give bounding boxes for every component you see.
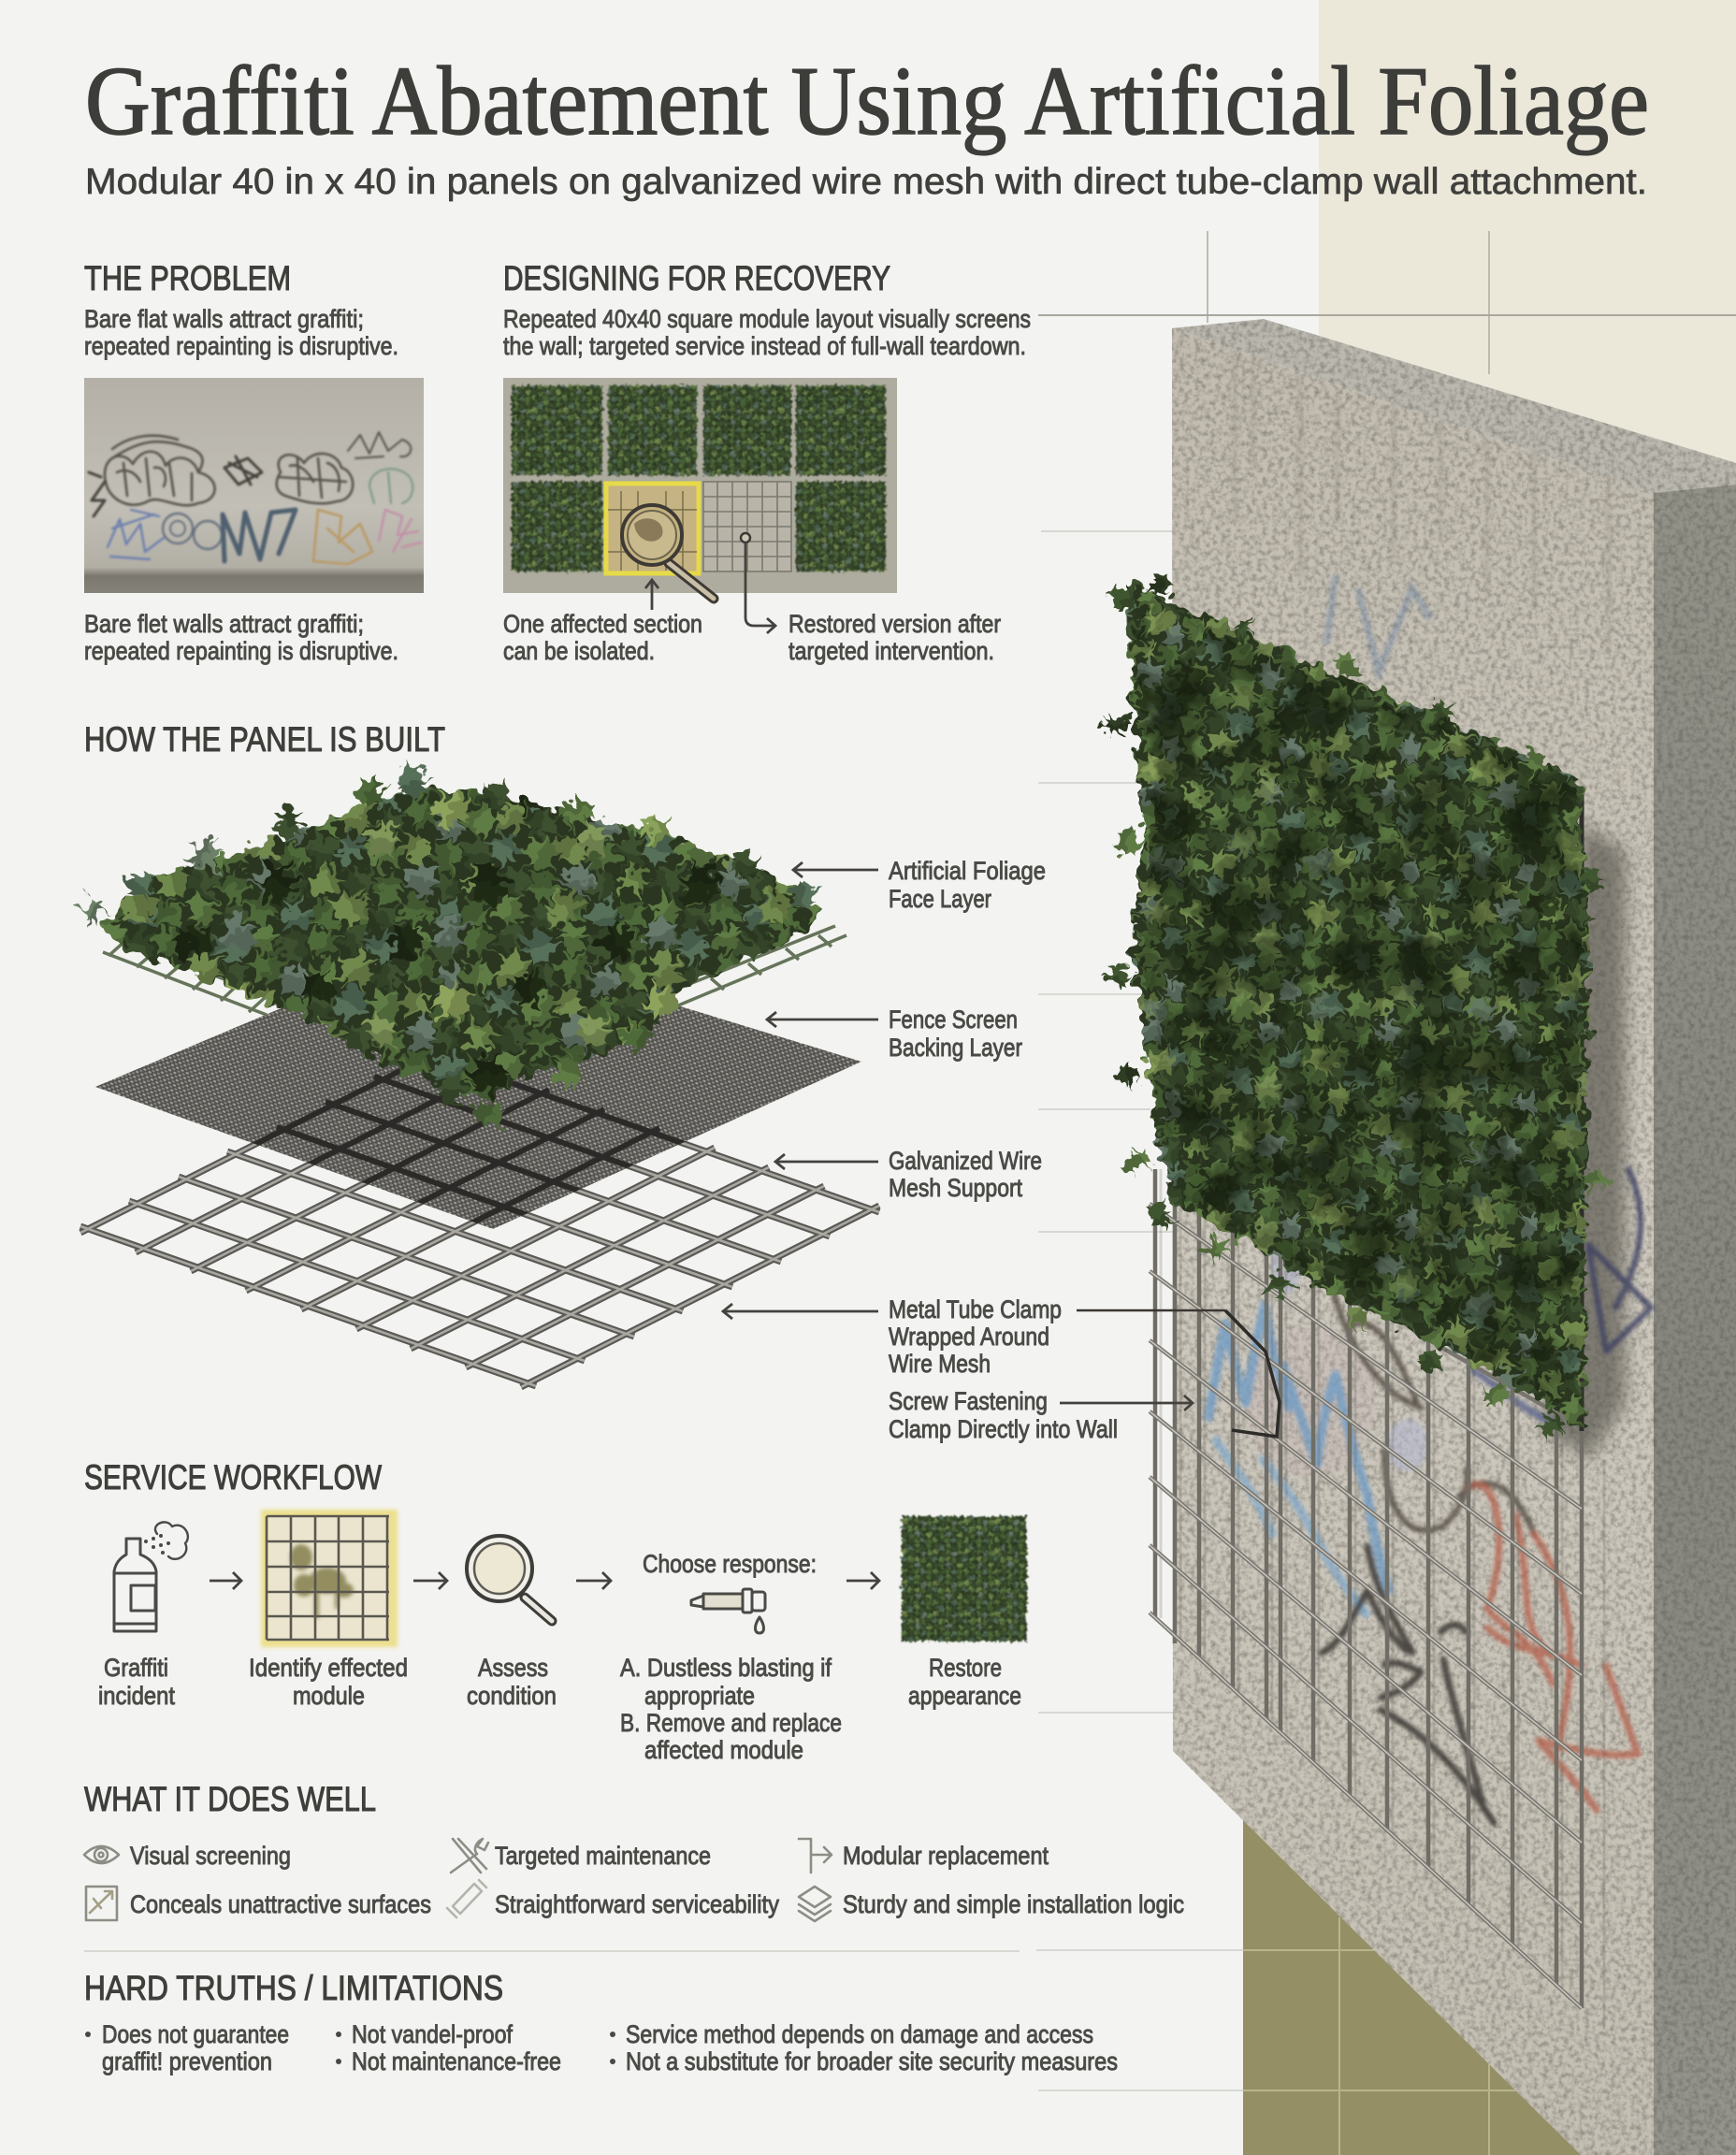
step label: identify module: Identify effected [249,1654,408,1682]
photo: graffiti on bare wall [84,378,424,593]
arrow [413,1572,447,1589]
caption: restored version: Restored version after [788,610,1001,638]
item: visual screening: Visual screening [130,1842,291,1870]
limitation: service and security: Not a substitute for broader site security measures [626,2047,1118,2075]
exploded diagram [71,758,879,1387]
step label: assess condition: condition [467,1682,557,1710]
callout: screw fastening: Clamp Directly into Wall [889,1415,1118,1443]
callout: galvanized wire mesh support [775,1147,1042,1202]
step label: response options [620,1654,842,1764]
item: conceals unattractive surfaces: Conceals unattractive surfaces [130,1890,431,1918]
panel: hard truths and limitations [84,1969,1118,2075]
heading: hard truths: HARD TRUTHS / LIMITATIONS [84,1969,503,2007]
callout: metal tube clamp: Metal Tube Clamp [889,1295,1062,1323]
problem description [84,305,398,360]
callout: artificial foliage face layer: Artificial Foliage [889,857,1046,885]
concrete wall front face [1172,328,1654,2155]
arrow: to restored version [741,533,775,633]
wall drip streaks [1235,351,1609,655]
heading: choose response: Choose response: [643,1550,817,1578]
callout: fence screen backing layer: Fence Screen [889,1005,1018,1034]
step label: assess condition [467,1654,557,1710]
item: sturdy installation logic: Sturdy and simple installation logic [843,1890,1184,1918]
callout: screw fastening [889,1387,1193,1443]
step label: graffiti incident [98,1654,175,1710]
recovery description: the wall; targeted service instead of full-wall teardown. [503,332,1026,360]
arrow: to isolated section [645,580,658,610]
heading: what it does well: WHAT IT DOES WELL [84,1780,376,1818]
icon: magnifier on affected module [622,505,714,599]
callout: artificial foliage face layer: Face Layer [889,885,991,913]
step label: graffiti incident: incident [98,1682,175,1710]
callout: fence screen backing layer [767,1005,1022,1062]
limitation: service and security: Service method depends on damage and access [626,2020,1093,2048]
item: sturdy installation logic [799,1887,1184,1921]
photo caption: repeated repainting is disruptive. [84,637,398,665]
cream backdrop panel [1319,0,1736,580]
limitation: prevention [85,2020,289,2075]
concrete wall side face [1654,485,1736,2155]
recovery description [503,305,1031,360]
step label: restore appearance [908,1654,1021,1710]
layer: galvanized wire mesh [80,1051,879,1387]
callout: galvanized wire mesh support: Mesh Support [889,1174,1022,1202]
limitation: vandal and maintenance: Not maintenance-free [352,2047,561,2075]
limitation: prevention: graffit! prevention [102,2047,272,2075]
layer: fence screen backing [95,936,861,1229]
problem description: Bare flat walls attract graffiti; [84,305,364,333]
step label: response options: A. Dustless blasting if [620,1654,832,1682]
subtitle: Modular 40 in x 40 in panels on galvanized wire mesh with direct tube-clamp wall attachment. [85,162,1647,202]
heading: the problem: THE PROBLEM [84,259,291,297]
foliage panel shadow on wall [1543,823,1626,1459]
limitation: vandal and maintenance: Not vandel-proof [352,2020,513,2048]
photo caption: Bare flet walls attract graffiti; [84,610,364,638]
item: targeted maintenance: Targeted maintenance [495,1842,711,1870]
exposed mesh module [703,482,791,571]
icon: affected module [264,1512,395,1644]
limitation: prevention: Does not guarantee [102,2020,289,2048]
icon: spray can [114,1522,188,1631]
heading: how the panel is built: HOW THE PANEL IS BUILT [84,720,445,759]
caption: isolated section [503,610,702,665]
wall illustration [1100,319,1736,2155]
icon: magnifier [467,1536,552,1621]
panel: designing for recovery [503,259,1031,665]
callout: fence screen backing layer: Backing Layer [889,1034,1022,1062]
layer: artificial foliage [71,758,823,1138]
mesh shadow through screen [252,1068,687,1223]
limitation: service and security [610,2020,1118,2075]
diagram: modular foliage grid [503,378,897,593]
callout: metal tube clamp [723,1295,1225,1378]
callout: artificial foliage face layer [793,857,1046,913]
title: Graffiti Abatement Using Artificial Foliage [85,46,1649,155]
callout: metal tube clamp: Wire Mesh [889,1350,991,1378]
metal tube clamp detail [1225,1310,1280,1437]
item: straightforward serviceability [447,1880,779,1918]
arrow [846,1572,879,1589]
caption: restored version [788,610,1001,665]
olive backdrop panel [1243,1777,1736,2155]
galvanized wire mesh on wall [1150,788,1604,2030]
panel: the problem [84,259,424,665]
item: modular replacement: Modular replacement [843,1842,1049,1870]
panel: service workflow [84,1458,1027,1764]
arrow [210,1572,241,1589]
step label: restore appearance: appearance [908,1682,1021,1710]
caption: isolated section: can be isolated. [503,637,655,665]
item: targeted maintenance [451,1839,711,1873]
callout: screw fastening: Screw Fastening [889,1387,1048,1415]
limitation: vandal and maintenance [336,2020,561,2075]
callout: galvanized wire mesh support: Galvanized Wire [889,1147,1042,1175]
icon: restored foliage module [902,1516,1027,1642]
heading: service workflow: SERVICE WORKFLOW [84,1458,382,1497]
caption: isolated section: One affected section [503,610,702,638]
artificial foliage panel on wall [1100,567,1610,1447]
heading: designing for recovery: DESIGNING FOR RECOVERY [503,259,890,297]
item: modular replacement [799,1839,1049,1873]
problem description: repeated repainting is disruptive. [84,332,398,360]
step label: response options: B. Remove and replace [620,1709,842,1737]
item: conceals unattractive surfaces [86,1887,431,1920]
photo caption [84,610,398,665]
faint graffiti above foliage [1326,575,1430,673]
recovery description: Repeated 40x40 square module layout visually screens [503,305,1031,333]
concrete wall top face [1172,319,1736,493]
step label: identify module [249,1654,408,1710]
item: visual screening [84,1842,291,1870]
step label: identify module: module [293,1682,365,1710]
step label: response options: appropriate [644,1682,755,1710]
panel: how the panel is built [71,720,1225,1443]
foliage backing lattice [103,926,846,1015]
arrow [576,1572,611,1589]
foliage modules [512,385,886,571]
step label: restore appearance: Restore [929,1654,1002,1682]
callout: metal tube clamp: Wrapped Around [889,1323,1049,1351]
exposed graffiti on wall [1208,1169,1651,1823]
icon: dropper [691,1589,765,1633]
panel: what it does well [84,1780,1184,1921]
caption: restored version: targeted intervention. [788,637,994,665]
item: straightforward serviceability: Straightforward serviceability [495,1890,779,1918]
highlighted affected module [606,484,699,573]
step label: graffiti incident: Graffiti [104,1654,168,1682]
step label: response options: affected module [644,1736,803,1764]
step label: assess condition: Assess [478,1654,548,1682]
